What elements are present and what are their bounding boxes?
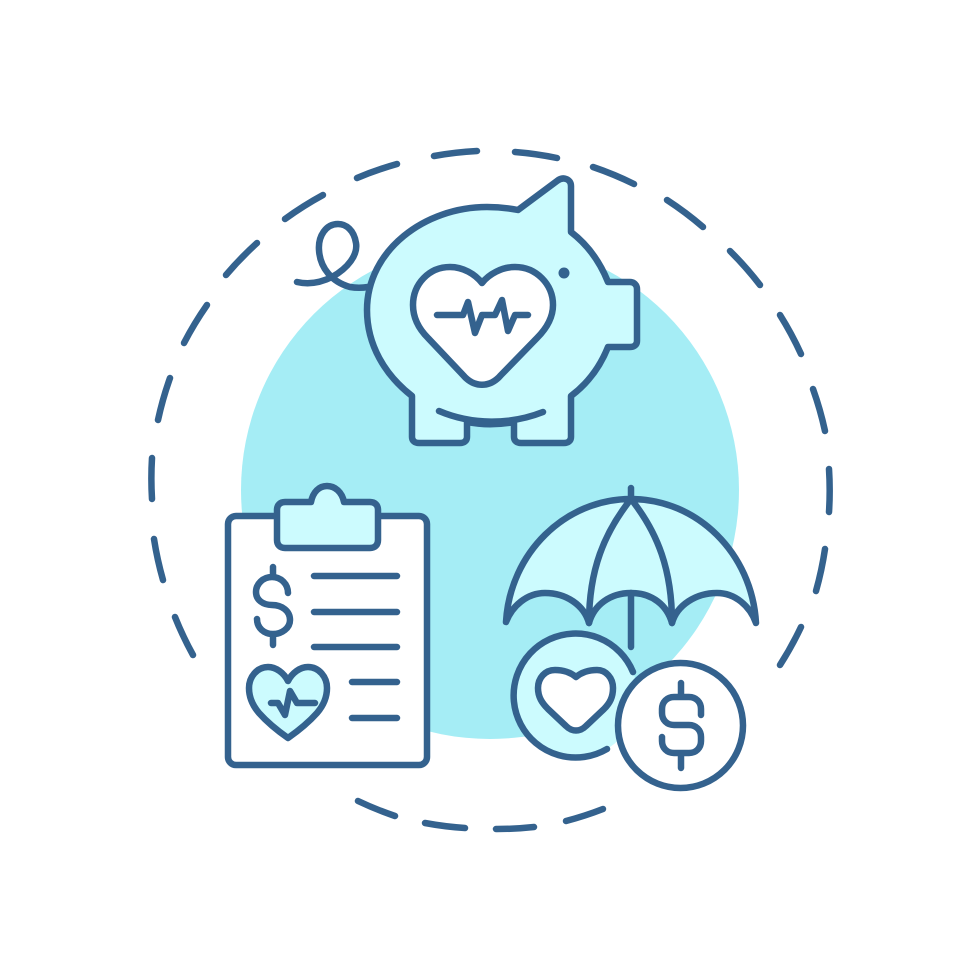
text lines [314, 576, 397, 718]
dollar sign [256, 567, 290, 645]
umbrella ribs [589, 488, 672, 647]
pig tail [297, 224, 368, 288]
coin dollar sign [662, 683, 701, 768]
umbrella canopy [506, 499, 756, 623]
coin heart [538, 670, 613, 730]
pig eye [558, 268, 570, 278]
clipboard clip [277, 486, 378, 548]
icon: clipboard [228, 486, 427, 765]
pig belly line [439, 411, 543, 422]
pig heart [413, 267, 553, 385]
clipboard heart [249, 667, 327, 738]
heart coin [514, 634, 638, 758]
icon: umbrella with coins [506, 488, 756, 788]
pig body [367, 179, 637, 443]
dashed ring [151, 151, 830, 829]
icon: piggy bank [297, 179, 637, 443]
clipboard pulse [271, 691, 315, 715]
clipboard board [228, 516, 427, 765]
background circle [241, 241, 739, 739]
dollar coin [618, 663, 743, 788]
pulse line [437, 300, 528, 333]
